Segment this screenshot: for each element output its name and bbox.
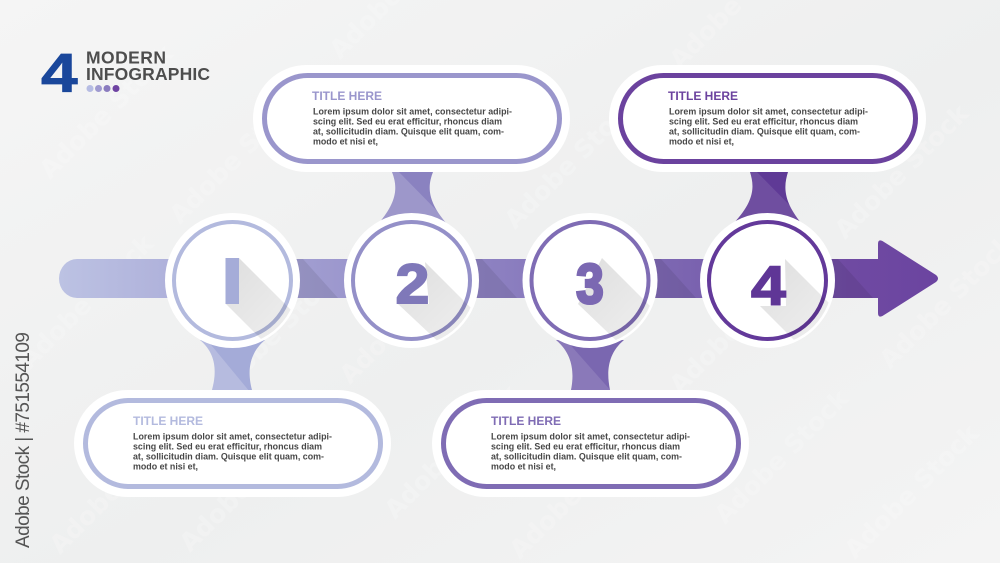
step 4 body: modo et nisi et, [669, 137, 734, 147]
watermark pattern: Adobe Stock [34, 38, 180, 184]
numeral 3: 3 [576, 253, 604, 316]
numeral 2: 2 [396, 253, 429, 315]
badge: step 2 [344, 213, 489, 349]
step 2 body [313, 106, 512, 147]
badge: step 3 [522, 213, 668, 349]
step 1 title: TITLE HERE [133, 414, 203, 428]
step 1 body: at, sollicitudin diam. Quisque elit quam, com- [133, 452, 324, 462]
watermark pattern: Adobe Stock [174, 411, 320, 557]
step 4 body: at, sollicitudin diam. Quisque elit quam, com- [669, 127, 860, 137]
panel: step 3 text [432, 390, 749, 497]
step 1 body: Lorem ipsum dolor sit amet, consectetur adipi- [133, 432, 332, 442]
watermark pattern: Adobe Stock [829, 98, 975, 244]
watermark pattern: Adobe Stock [504, 418, 650, 563]
step 4 title: TITLE HERE [668, 89, 738, 103]
step 3 body: at, sollicitudin diam. Quisque elit quam, com- [491, 452, 682, 462]
arrow timeline [59, 238, 940, 319]
panel: step 2 text [253, 65, 570, 172]
connector: step 4 [735, 172, 800, 222]
watermark pattern: Adobe Stock [664, 253, 810, 399]
step 2 body: modo et nisi et, [313, 137, 378, 147]
badge: step 4 [700, 213, 846, 349]
numeral 4: 4 [751, 254, 786, 317]
step 1 body: scing elit. Sed eu erat efficitur, rhoncus diam [133, 442, 322, 452]
step 2 body: Lorem ipsum dolor sit amet, consectetur adipi- [313, 106, 512, 116]
connector: step 3 [556, 340, 624, 390]
vertical stock id text: Adobe Stock | #751554109 [13, 332, 34, 548]
logo heading: INFOGRAPHIC [86, 64, 210, 84]
watermark pattern: Adobe Stock [14, 228, 160, 374]
watermark pattern: Adobe Stock [499, 88, 645, 234]
watermark pattern: Adobe Stock [709, 383, 855, 529]
step 2 body: scing elit. Sed eu erat efficitur, rhoncus diam [313, 117, 502, 127]
logo [41, 42, 210, 103]
panel: step 4 text [609, 65, 926, 172]
logo heading [86, 48, 210, 84]
connector: step 1 [200, 340, 265, 390]
step 3 body: Lorem ipsum dolor sit amet, consectetur adipi- [491, 432, 690, 442]
step 2 body: at, sollicitudin diam. Quisque elit quam, com- [313, 127, 504, 137]
step 4 body: scing elit. Sed eu erat efficitur, rhoncus diam [669, 117, 858, 127]
connector: step 2 [381, 172, 446, 222]
step 1 body: modo et nisi et, [133, 462, 198, 472]
step 4 body: Lorem ipsum dolor sit amet, consectetur adipi- [669, 106, 868, 116]
watermark pattern: Adobe Stock [164, 83, 310, 229]
watermark pattern: Adobe Stock [44, 413, 190, 559]
step 3 body: scing elit. Sed eu erat efficitur, rhoncus diam [491, 442, 680, 452]
numeral 1: 1 [216, 253, 248, 316]
step 3 body [491, 432, 690, 472]
watermark pattern: Adobe Stock [334, 243, 480, 389]
logo heading: MODERN [86, 48, 166, 68]
logo dots [86, 85, 120, 92]
step 2 title: TITLE HERE [312, 89, 382, 103]
step 1 body [133, 432, 332, 472]
step 3 title: TITLE HERE [491, 414, 561, 428]
numeral 1 [226, 258, 239, 304]
step 3 body: modo et nisi et, [491, 462, 556, 472]
logo numeral: 4 [41, 42, 78, 103]
watermark pattern: Adobe Stock [379, 378, 525, 524]
watermark pattern: Adobe Stock [839, 418, 985, 563]
watermark pattern: Adobe Stock [204, 258, 350, 404]
step 4 body [669, 106, 868, 147]
panel: step 1 text [74, 390, 391, 497]
badge: step 1 [165, 213, 309, 349]
